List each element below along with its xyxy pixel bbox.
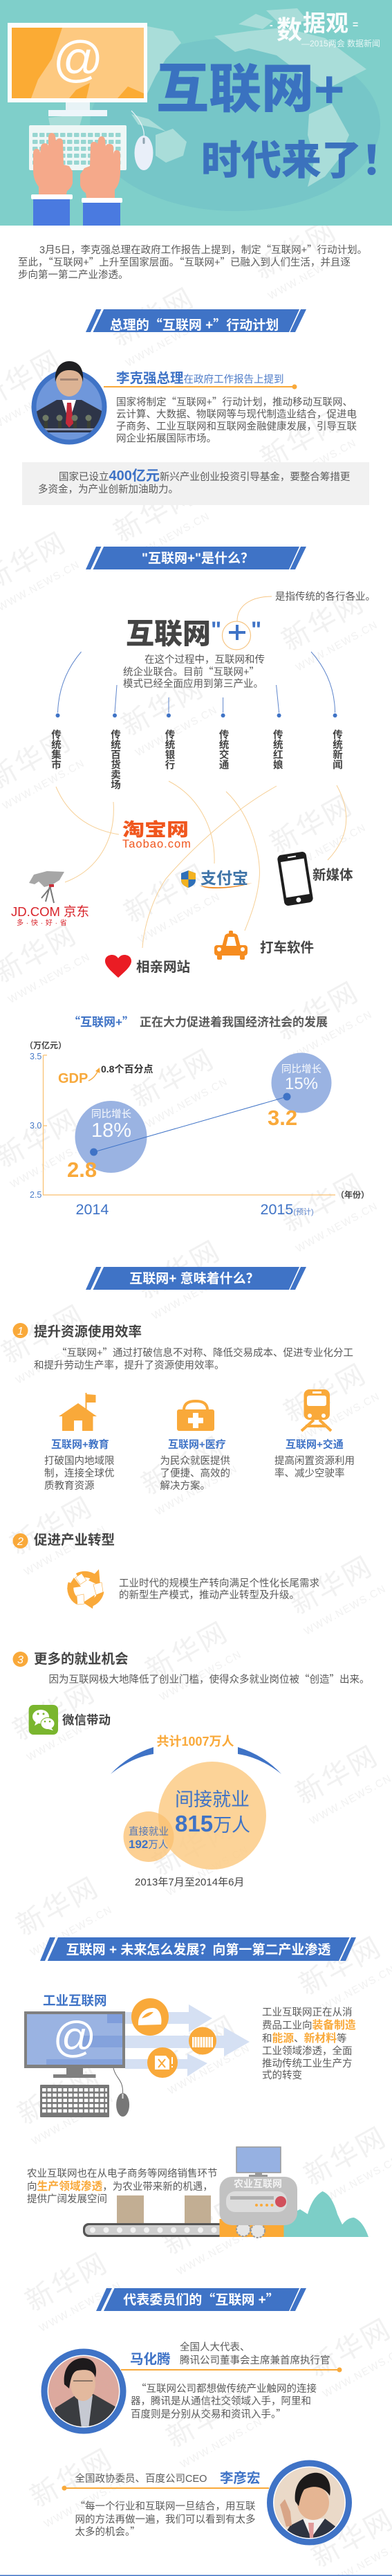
- text: WWW.NEWS.CN: [282, 821, 368, 877]
- role: 全国人大代表、: [180, 2341, 250, 2353]
- text: 新华网: [279, 1358, 372, 1428]
- data values: 3.2: [268, 1106, 297, 1130]
- vertical labels: traditional industries: 传统红娘: [272, 729, 283, 770]
- icon: computer: [24, 2011, 125, 2093]
- quote: “互联网公司都想做传统产业触网的连接: [136, 2381, 317, 2395]
- text: WWW.NEWS.CN: [165, 1843, 251, 1899]
- column: transport: 率、减少空驶率: [274, 1468, 344, 1479]
- text: WWW.NEWS.CN: [42, 2475, 129, 2530]
- illustration: mountains: [283, 2191, 368, 2237]
- label: dating sites: 相亲网站: [136, 959, 190, 975]
- bubble labels: 15%: [285, 1075, 318, 1093]
- heading banner: delegates: [96, 2288, 306, 2311]
- portrait: Li Keqiang: [32, 361, 106, 444]
- brand: data watch: =: [353, 19, 358, 30]
- axes: 2.5: [30, 1190, 41, 1200]
- chart title: 正在大力促进着我国经济社会的发展: [140, 1015, 328, 1029]
- text: 新华网: [137, 1431, 230, 1501]
- logo: Taobao: 淘宝网: [122, 819, 189, 840]
- portrait: Li Yanhong: [267, 2460, 352, 2545]
- quote: 百度则是分别从交易和资讯入手。”: [131, 2406, 286, 2421]
- icon: right hand: [80, 136, 122, 226]
- heading banner: premier's plan: 总理的“互联网 +”行动计划: [110, 315, 279, 334]
- title: internet plus: ": [211, 617, 221, 642]
- text: WWW.NEWS.CN: [1, 757, 87, 812]
- title: internet plus: ": [251, 617, 261, 642]
- bubble labels: 同比增长: [91, 1108, 131, 1120]
- GDP annotation: GDP: [58, 1071, 88, 1086]
- illustration: farm machine: [220, 2147, 297, 2238]
- intro paragraph: [18, 242, 367, 281]
- intro paragraph: 3月5日，李克强总理在政府工作报告上提到，制定“互联网+”行动计划。: [39, 242, 367, 257]
- heading banner: what is internet plus: [86, 547, 306, 569]
- text: 新华网: [141, 1616, 234, 1686]
- text: 新华网: [295, 1931, 387, 2001]
- text: WWW.NEWS.CN: [136, 890, 223, 946]
- logo: Alipay: [181, 869, 252, 888]
- intro paragraph: 步向第一第二产业渗透。: [18, 268, 129, 281]
- text: WWW.NEWS.CN: [294, 1200, 380, 1255]
- column: healthcare: 了便捷、高效的: [160, 1468, 230, 1479]
- text: WWW.NEWS.CN: [8, 1135, 95, 1191]
- panel: Ma Huateng: [41, 2341, 342, 2434]
- text: WWW.NEWS.CN: [28, 1903, 115, 1959]
- illustration: boxes: [117, 2195, 211, 2223]
- axes: （年份）: [336, 1189, 369, 1200]
- bubble: 2015 growth: [271, 1053, 332, 1113]
- axes: 3.5: [30, 1052, 41, 1061]
- world map: [48, 8, 366, 187]
- text block: explanation: 在这个过程中，互联网和传: [144, 654, 265, 666]
- name: 李彦宏: [220, 2470, 261, 2486]
- logo: Taobao: Taobao.com: [122, 838, 192, 850]
- chart title: “互联网+”: [68, 1012, 134, 1030]
- figures: direct employment: 直接就业: [129, 1826, 169, 1838]
- heading: transformation: 促进产业转型: [34, 1533, 115, 1548]
- text: 新华网: [148, 1811, 241, 1881]
- text block: transformation: 的新型生产模式，推动产业转型及升级。: [119, 1589, 299, 1601]
- text: 新华网: [13, 2061, 106, 2130]
- icon: WeChat: [29, 1705, 58, 1735]
- title: 互联网+: [156, 60, 344, 119]
- heading banner: what it means: [86, 1267, 306, 1290]
- bubbles: direct and indirect jobs: [123, 1762, 266, 1870]
- icon: smartphone: [277, 851, 314, 906]
- text block: efficiency: [34, 1345, 353, 1371]
- icon: helmet circle: [131, 1998, 169, 2036]
- GDP annotation: 0.8个百分点: [101, 1063, 153, 1075]
- logo: JD.COM: [11, 871, 89, 927]
- text: WWW.NEWS.CN: [166, 2042, 252, 2097]
- heading banner: premier's plan: [86, 309, 306, 334]
- column: healthcare: 为民众就医提供: [160, 1455, 230, 1467]
- label: WeChat: 微信带动: [62, 1713, 111, 1727]
- text: WWW.NEWS.CN: [14, 1331, 100, 1387]
- year labels: 2015(预计): [260, 1201, 314, 1218]
- text: 新华网: [277, 1168, 370, 1238]
- text block: explanation: [123, 654, 265, 690]
- text block: plan: 网企业拓展国际市场。: [116, 432, 216, 444]
- column: education: 互联网+教育: [51, 1438, 109, 1450]
- badge 3: 3: [17, 1654, 24, 1666]
- column: healthcare: 互联网+医疗: [168, 1438, 226, 1450]
- text: WWW.NEWS.CN: [288, 1008, 375, 1063]
- text: 新华网: [12, 1872, 104, 1942]
- text: 新华网: [117, 672, 209, 742]
- column: education: 打破国内地域限: [44, 1455, 115, 1467]
- text block: industrial internet: 和能源、新材料等: [262, 2031, 347, 2045]
- column: education: 质教育资源: [44, 1480, 95, 1492]
- text block: industrial internet: [262, 2007, 356, 2081]
- data values: 2.8: [67, 1158, 97, 1182]
- icon: keyboard grey: [40, 2085, 109, 2117]
- title: internet plus: 互联网: [126, 618, 211, 650]
- axes: 3.0: [30, 1121, 41, 1131]
- panel: efficiency: [12, 1323, 355, 1492]
- badge 2: 2: [17, 1536, 24, 1548]
- title: internet plus: [126, 617, 261, 650]
- intro paragraph: 至此，“互联网+”上升至国家层面。“互联网+”已融入到人们生活，并且逐: [18, 255, 351, 269]
- column: healthcare: 解决方案。: [160, 1479, 210, 1492]
- icon: computer: @: [53, 2013, 95, 2061]
- text: WWW.NEWS.CN: [153, 1463, 240, 1518]
- heading banner: future development: 互联网 + 未来怎么发展？向第一第二产业渗透: [66, 1942, 330, 1957]
- text: 新华网: [127, 1043, 220, 1113]
- illustration: conveyor belt: [83, 2223, 225, 2237]
- text block: plan: 云计算、大数据、物联网等与现代制造业结合，促进电: [116, 408, 357, 421]
- icon: desktop monitor: @: [53, 32, 104, 87]
- text: WWW.NEWS.CN: [30, 2092, 116, 2148]
- vertical labels: traditional industries: 传统交通: [218, 729, 229, 769]
- text: 新华网: [133, 1235, 226, 1305]
- data line: [90, 1093, 290, 1155]
- text: 新华网: [272, 976, 364, 1046]
- panel: internet plus diagram: [11, 591, 375, 978]
- brand: data watch: -: [270, 19, 273, 30]
- label: taxi apps: 打车软件: [260, 940, 314, 956]
- portrait: Ma Huateng: [41, 2348, 126, 2434]
- arcs: [111, 1747, 281, 1774]
- name: 马化腾: [130, 2352, 171, 2367]
- badge 3: [12, 1652, 28, 1667]
- quote: “每一个行业和互联网一旦结合，用互联: [75, 2499, 256, 2513]
- text block: industrial internet: 式的转变: [262, 2070, 302, 2081]
- date range: 2013年7月至2014年6月: [135, 1876, 244, 1888]
- illustration: farm machine: 农业互联网: [234, 2178, 282, 2189]
- text: WWW.NEWS.CN: [296, 1390, 382, 1445]
- quote: 网的方法再做一遍，我们可以看到有太多: [75, 2514, 256, 2525]
- text: WWW.NEWS.CN: [22, 1523, 109, 1578]
- column: healthcare: [160, 1401, 230, 1492]
- text: WWW.NEWS.CN: [133, 704, 220, 759]
- vertical labels: traditional industries: [50, 729, 342, 790]
- panel: Robin Li: [62, 2460, 352, 2545]
- text block: agricultural internet: 提供广阔发展空间: [27, 2193, 107, 2205]
- icon: taxi: [214, 931, 248, 960]
- divider with dot: [104, 385, 297, 389]
- text: 新华网: [299, 2121, 392, 2191]
- text block: explanation: 模式已经全面应用到第三产业。: [123, 677, 263, 690]
- divider with dot: [62, 2485, 269, 2491]
- heading: name and source: 李克强总理在政府工作报告上提到: [116, 371, 284, 386]
- text: WWW.NEWS.CN: [272, 437, 359, 492]
- text: 新华网: [21, 2247, 113, 2317]
- total label: 共计1007万人: [156, 1735, 234, 1748]
- icon: train: [301, 1389, 331, 1431]
- text: WWW.NEWS.CN: [25, 1708, 111, 1764]
- text block: agricultural internet: 向生产领域渗透，为农业带来新的机遇，: [27, 2180, 213, 2193]
- text: 新华网: [265, 789, 358, 859]
- text: WWW.NEWS.CN: [144, 1075, 230, 1131]
- label: new media: 新媒体: [312, 868, 353, 883]
- icon: container circle: [189, 2027, 216, 2055]
- badge 1: [12, 1323, 28, 1338]
- text block: employment: 因为互联网极大地降低了创业门槛，使得众多就业岗位被“创造”出来。: [48, 1672, 369, 1686]
- annotation: plus meaning: 是指传统的各行各业。: [275, 591, 375, 603]
- text: WWW.NEWS.CN: [126, 510, 212, 565]
- orange connector curves: [56, 781, 346, 948]
- figures: direct employment: 192万人: [129, 1838, 168, 1851]
- text: 新华网: [109, 478, 202, 548]
- text block: industrial internet: 费品工业向装备制造: [262, 2018, 356, 2031]
- panel: hero header: [0, 0, 392, 226]
- blue connector lines: [55, 652, 337, 718]
- text: WWW.NEWS.CN: [175, 2222, 261, 2278]
- bubble labels: 18%: [91, 1120, 131, 1142]
- axes: [25, 1040, 369, 1200]
- panel: premier Li Keqiang: [32, 361, 357, 444]
- badge 2: [12, 1533, 28, 1549]
- text: 新华网: [256, 405, 348, 475]
- heading banner: delegates: 代表委员们的“互联网 +”: [123, 2290, 279, 2308]
- text block: plan: [116, 394, 357, 444]
- text block: agricultural internet: 农业互联网也在从电子商务等网络销售环节: [27, 2167, 217, 2180]
- text: 新华网: [149, 2010, 242, 2080]
- axes: （万亿元）: [25, 1040, 66, 1050]
- GDP annotation: [58, 1063, 153, 1086]
- logo: Alipay: 支付宝: [200, 869, 248, 887]
- heading: industrial internet: 工业互联网: [43, 1993, 107, 2008]
- icon: medical case: [177, 1401, 214, 1431]
- icon: recycle arrows: [67, 1569, 103, 1609]
- text: 新华网: [162, 2384, 254, 2454]
- year labels: [76, 1201, 314, 1218]
- text: 新华网: [8, 1677, 101, 1746]
- text: WWW.NEWS.CN: [158, 1648, 244, 1703]
- vertical labels: traditional industries: 传统百货卖场: [109, 729, 120, 790]
- brand: data watch: —2015两会 数据新闻: [301, 38, 380, 48]
- text: 新华网: [286, 1551, 378, 1620]
- year labels: 2014: [76, 1201, 109, 1218]
- text block: explanation: 统企业联合。目前“互联网+”: [123, 664, 259, 679]
- text block: efficiency: “互联网+”通过打破信息不对称、降低交易成本、促进专业化分工: [57, 1345, 353, 1360]
- text: 新华网: [250, 215, 342, 285]
- text block: agricultural internet: [27, 2167, 217, 2205]
- bubble: 2014 growth: [75, 1101, 147, 1173]
- annotation: plus meaning: [237, 591, 375, 621]
- text block: industrial internet: 推动传统工业生产方: [262, 2058, 353, 2070]
- quote: [131, 2381, 317, 2421]
- text block: efficiency: 和提升劳动生产率，提升了资源使用效率。: [34, 1360, 224, 1371]
- quote: [75, 2499, 256, 2539]
- text: WWW.NEWS.CN: [6, 951, 93, 1006]
- panel: employment: [12, 1651, 369, 1888]
- text: WWW.NEWS.CN: [266, 247, 353, 302]
- brand: data watch: 据观: [303, 10, 348, 36]
- figures: indirect employment: 间接就业: [175, 1789, 250, 1810]
- text: 新华网: [158, 2191, 251, 2260]
- heading banner: future development: [40, 1937, 356, 1961]
- icon: desktop monitor: [8, 23, 147, 116]
- panel: industrial internet: [24, 1993, 356, 2117]
- heading: efficiency: 提升资源使用效率: [34, 1324, 142, 1340]
- column: transport: 提高闲置资源利用: [274, 1455, 355, 1467]
- brand: data watch: [270, 10, 380, 48]
- divider with dot: [121, 2368, 342, 2372]
- text: WWW.NEWS.CN: [302, 1582, 389, 1638]
- icon: keyboard: [29, 125, 127, 170]
- logo: Taobao: [122, 819, 192, 850]
- panel: industrial transformation: [12, 1533, 319, 1609]
- quote: 器，腾讯是从通信社交领域入手，阿里和: [131, 2395, 311, 2407]
- text: 新华网: [107, 282, 200, 352]
- text block: transformation: 工业时代的规模生产转向满足个性化长尾需求: [119, 1578, 319, 1589]
- text block: industrial internet: 工业领域渗透，全面: [262, 2045, 353, 2057]
- text: WWW.NEWS.CN: [308, 1772, 392, 1827]
- heading banner: what it means: 互联网+ 意味着什么？: [129, 1270, 259, 1286]
- icon: school house: [59, 1393, 97, 1431]
- text: WWW.NEWS.CN: [294, 619, 380, 674]
- text block: industrial internet: 工业互联网正在从消: [262, 2007, 353, 2018]
- bubble labels: [91, 1063, 321, 1142]
- icon: mouse grey: [116, 2093, 129, 2117]
- callout: 40 billion fund: [22, 462, 369, 505]
- title: [156, 60, 392, 183]
- callout: 40 billion fund: 多资金，为产业创新加油助力。: [38, 484, 178, 495]
- column: transport: 互联网+交通: [286, 1438, 344, 1450]
- heading: employment: 更多的就业机会: [34, 1651, 129, 1667]
- heading banner: what is internet plus: "互联网+"是什么？: [142, 551, 254, 566]
- brand: data watch: 数: [277, 16, 302, 44]
- arrows flowing from monitor: [125, 2004, 250, 2076]
- figures: indirect employment: [175, 1789, 250, 1836]
- vertical labels: traditional industries: 传统集市: [50, 729, 61, 769]
- figures: indirect employment: 815万人: [175, 1811, 250, 1836]
- vertical labels: traditional industries: 传统银行: [163, 729, 175, 770]
- panel: agricultural internet: [27, 2147, 368, 2238]
- data values: [67, 1106, 297, 1182]
- chart title: [68, 1012, 328, 1030]
- text: 新华网: [120, 859, 212, 929]
- logo: JD.COM: JD.COM 京东: [11, 904, 89, 919]
- icon: heart: [105, 955, 131, 978]
- text block: transformation: [119, 1578, 319, 1601]
- badge 1: 1: [17, 1326, 24, 1337]
- text block: plan: 国家将制定“互联网+”行动计划，推动移动互联网、: [116, 394, 353, 409]
- role: 腾讯公司董事会主席兼首席执行官: [180, 2355, 330, 2366]
- text: WWW.NEWS.CN: [150, 1267, 236, 1322]
- role: [180, 2341, 330, 2366]
- text: 新华网: [6, 1491, 98, 1561]
- bubble labels: 同比增长: [281, 1063, 321, 1075]
- text: 新华网: [277, 587, 370, 657]
- text: 新华网: [26, 2443, 118, 2513]
- line chart: GDP contribution: [25, 1040, 369, 1218]
- icon: mouse: [131, 111, 153, 170]
- icon: canister circle: [147, 2047, 178, 2078]
- vertical labels: traditional industries: 传统新闻: [331, 729, 342, 770]
- text: WWW.NEWS.CN: [178, 2415, 265, 2471]
- callout: 40 billion fund: 国家已设立400亿元新兴产业创业投资引导基金，要整合筹措更: [59, 468, 351, 484]
- logo: JD.COM: 多·快·好·省: [17, 918, 70, 927]
- column: transport: [274, 1389, 355, 1479]
- text block: plan: 子商务、工业互联网和互联网金融健康发展，引导互联: [116, 421, 357, 432]
- column: education: 制，连接全球优: [44, 1467, 115, 1479]
- quote: 太多的机会。”: [75, 2524, 140, 2539]
- text: WWW.NEWS.CN: [37, 2279, 124, 2335]
- text: 新华网: [291, 1740, 384, 1810]
- role: 全国政协委员、百度公司CEO: [75, 2472, 207, 2485]
- figures: direct employment: [129, 1826, 169, 1851]
- text: WWW.NEWS.CN: [124, 314, 210, 369]
- column: education: [44, 1393, 115, 1492]
- icon: left hand: [31, 133, 73, 226]
